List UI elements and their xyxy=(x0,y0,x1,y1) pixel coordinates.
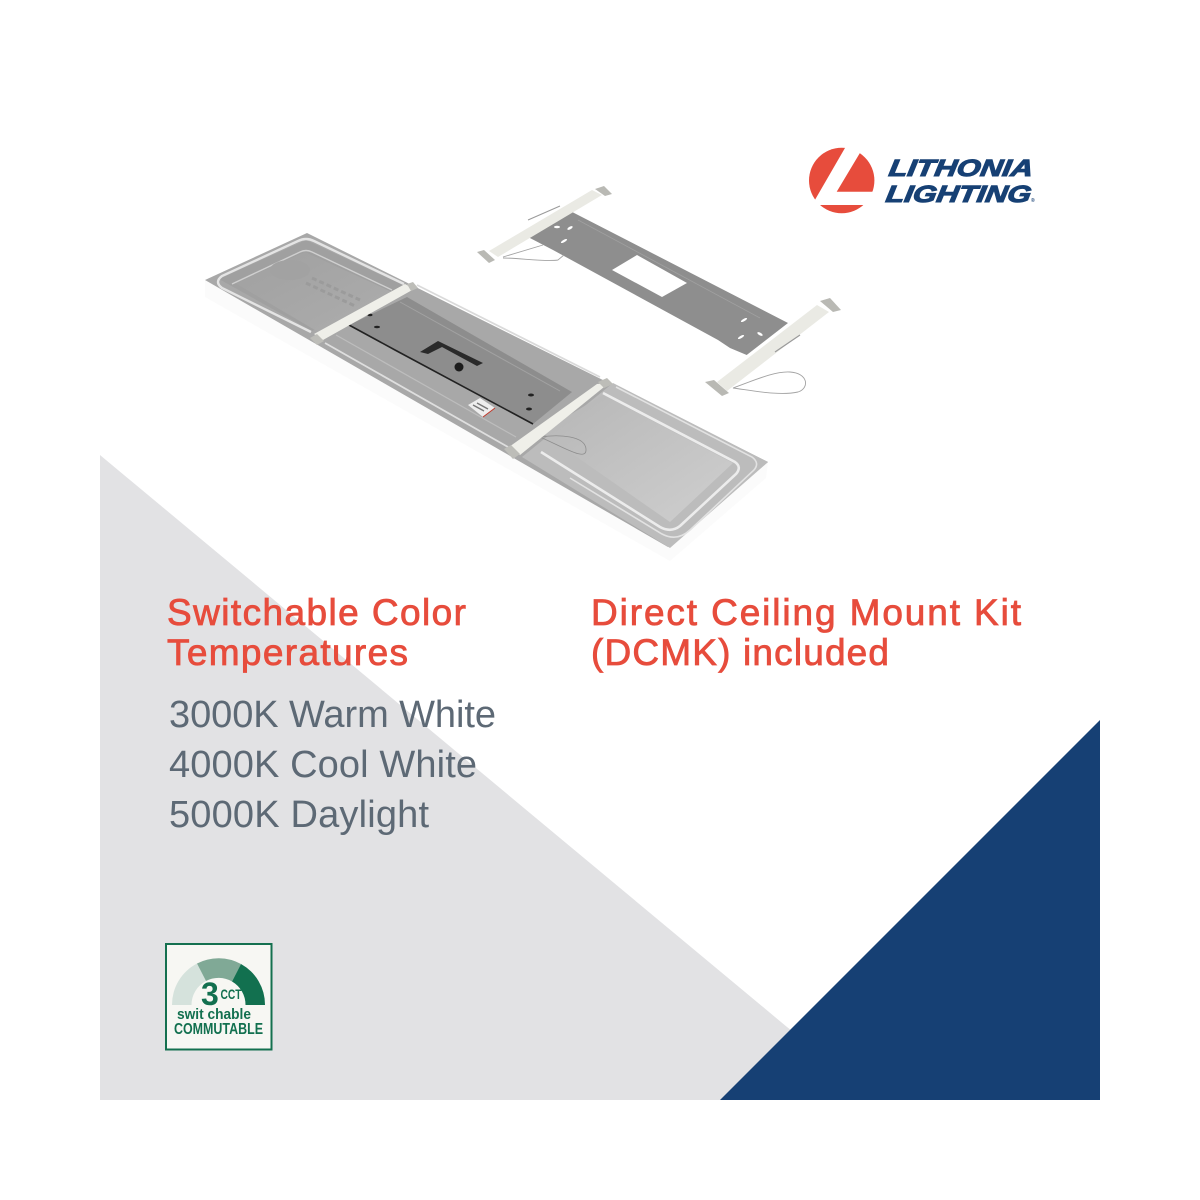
kit mounting plate xyxy=(528,212,788,355)
kit bracket bottom-right xyxy=(705,298,841,396)
background: grey triangle xyxy=(100,455,880,1100)
heading: switchable color temperatures xyxy=(167,592,466,673)
logo: Lithonia Lighting xyxy=(809,145,1035,213)
logo wordmark: LITHONIA xyxy=(887,156,1035,182)
mounting bracket 2 xyxy=(504,378,613,459)
heading: direct ceiling mount kit: (DCMK) included xyxy=(591,632,889,673)
logo wordmark: ® xyxy=(1031,197,1035,204)
heading: switchable color temperatures: Switchable Color xyxy=(167,592,466,633)
badge text: 3 xyxy=(201,976,219,1012)
centre mounting plate xyxy=(349,297,572,424)
badge text xyxy=(174,976,263,1038)
panel back face xyxy=(205,233,768,547)
logo mark xyxy=(809,145,880,213)
panel white side xyxy=(205,280,768,561)
middle channel rails xyxy=(325,285,600,447)
product label xyxy=(468,398,495,417)
color temperature list xyxy=(169,694,496,836)
badge frame xyxy=(166,944,272,1050)
logo wordmark xyxy=(884,156,1035,208)
badge: 3CCT switchable xyxy=(166,944,272,1050)
left end recess xyxy=(218,239,405,333)
badge text: COMMUTABLE xyxy=(174,1021,263,1038)
heading: direct ceiling mount kit: Direct Ceiling Mount Kit xyxy=(591,592,1022,633)
color temperature list: 4000K Cool White xyxy=(169,744,477,786)
mounting bracket 1 xyxy=(310,282,418,345)
product: assembled panel with mounting kit xyxy=(205,186,841,561)
heading: switchable color temperatures: Temperatures xyxy=(167,632,408,673)
background: blue triangle xyxy=(720,720,1100,1100)
color temperature list: 3000K Warm White xyxy=(169,694,496,736)
logo wordmark: LIGHTING xyxy=(884,182,1033,208)
color temperature list: 5000K Daylight xyxy=(169,794,429,836)
heading: direct ceiling mount kit xyxy=(591,592,1022,673)
right end recess xyxy=(522,383,768,548)
gauge arc xyxy=(172,958,265,1005)
badge text: CCT xyxy=(220,987,242,1002)
badge text: swit chable xyxy=(177,1007,251,1023)
kit bracket top-left xyxy=(477,186,612,263)
safety wires xyxy=(503,245,806,393)
